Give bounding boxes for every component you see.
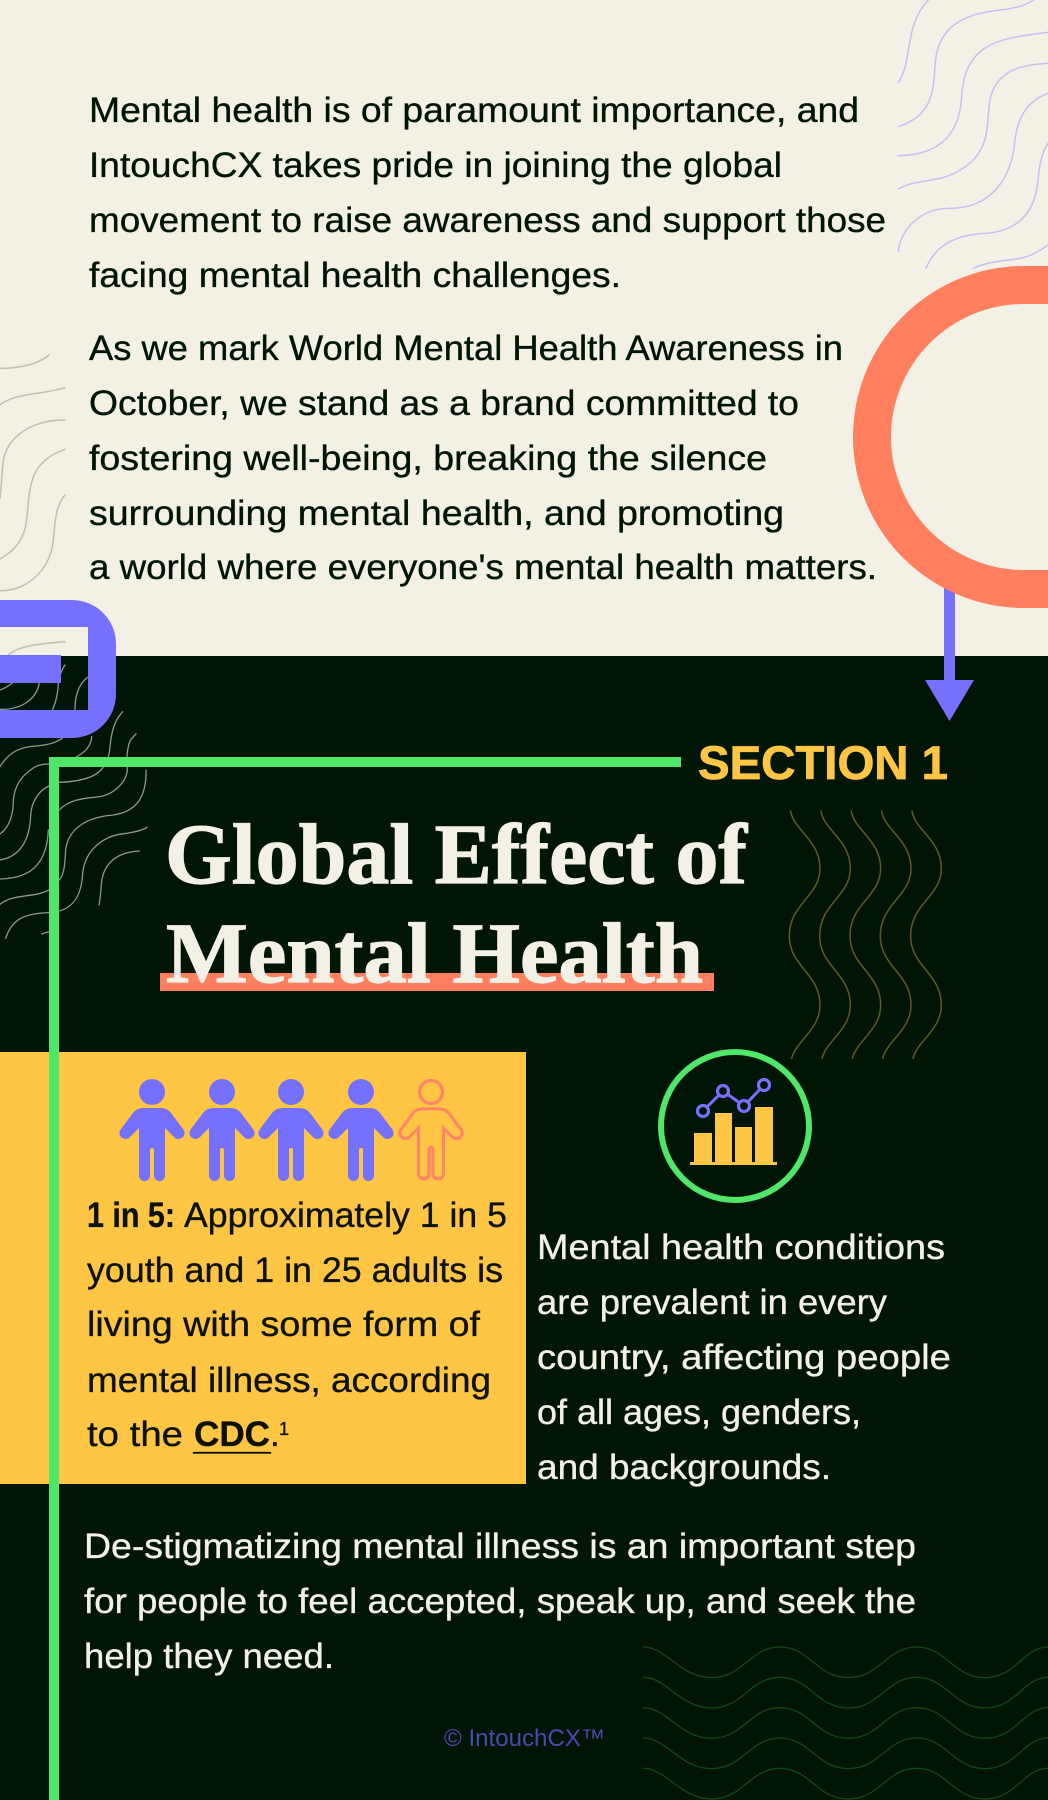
text block: 1 in 5 statistic: living with some form of — [87, 1305, 480, 1344]
text block: 1 in 5 statistic — [87, 1196, 507, 1454]
panel: dark section background — [0, 656, 1048, 1800]
text block: intro paragraph 2: fostering well-being, breaking the silence — [89, 439, 767, 478]
decorative grey waves left on dark, lower part — [0, 764, 147, 938]
text block: prevalence statement: and backgrounds. — [537, 1448, 831, 1487]
panel: cream intro background — [0, 0, 1048, 656]
text block: 1 in 5 statistic: 1 — [279, 1419, 289, 1439]
footer copyright: © IntouchCX™ — [444, 1725, 605, 1752]
decorative grey waves left on dark, upper part — [0, 665, 136, 770]
icon: five people, four filled and one outlined — [119, 1079, 462, 1181]
text block: intro paragraph 1 — [89, 91, 886, 295]
text block: 1 in 5 statistic: youth and 1 in 25 adults is — [87, 1251, 503, 1290]
text block: 1 in 5 statistic: 1 in 5: — [87, 1196, 175, 1235]
text block: prevalence statement: of all ages, genders, — [537, 1393, 861, 1432]
text block: prevalence statement — [537, 1228, 951, 1487]
text block: intro paragraph 1: Mental health is of paramount importance, and — [89, 91, 859, 130]
text block: de-stigmatizing statement — [84, 1527, 916, 1676]
text block: de-stigmatizing statement: for people to feel accepted, speak up, and seek the — [84, 1582, 916, 1621]
shape: coral ring — [853, 266, 1048, 608]
arrow: purple down arrow — [925, 585, 974, 721]
text block: intro paragraph 2: October, we stand as a brand committed to — [89, 384, 799, 423]
decorative grey waves left on cream — [0, 355, 65, 655]
text block: intro paragraph 2: As we mark World Mental Health Awareness in — [89, 329, 843, 368]
text block: prevalence statement: country, affecting people — [537, 1338, 951, 1377]
text block: intro paragraph 1: IntouchCX takes pride in joining the global — [89, 146, 782, 185]
text block: intro paragraph 2 — [89, 329, 877, 587]
title: Global Effect of — [165, 806, 748, 902]
panel: yellow stat box — [0, 1052, 526, 1484]
text block: intro paragraph 2: surrounding mental health, and promoting — [89, 494, 784, 533]
text block: 1 in 5 statistic: mental illness, according — [87, 1361, 491, 1400]
title: Mental Health — [166, 905, 703, 1001]
text block: de-stigmatizing statement: De-stigmatizing mental illness is an important step — [84, 1527, 916, 1566]
text block: prevalence statement: Mental health conditions — [537, 1228, 945, 1267]
text block: 1 in 5 statistic: to the — [87, 1415, 183, 1454]
title underline — [160, 973, 714, 991]
text block: intro paragraph 1: movement to raise awareness and support those — [89, 201, 886, 240]
icon: chart in green circle — [661, 1052, 809, 1200]
decorative lavender waves top right — [898, 0, 1048, 268]
shape: purple rounded bracket — [0, 600, 116, 738]
text block: 1 in 5 statistic: Approximately 1 in 5 — [184, 1196, 507, 1235]
text block: intro paragraph 1: facing mental health challenges. — [89, 256, 621, 295]
text block: 1 in 5 statistic: CDC — [194, 1415, 270, 1454]
text block: intro paragraph 2: a world where everyone's mental health matters. — [89, 548, 877, 587]
text block: 1 in 5 statistic: . — [270, 1415, 280, 1454]
text block: de-stigmatizing statement: help they need. — [84, 1637, 334, 1676]
green frame line — [49, 757, 681, 1800]
text block: prevalence statement: are prevalent in every — [537, 1283, 888, 1322]
decorative gold vertical waves — [789, 811, 941, 1058]
title — [165, 806, 748, 1001]
decorative green waves bottom right — [643, 1647, 1048, 1799]
section label: SECTION 1 — [698, 736, 948, 789]
